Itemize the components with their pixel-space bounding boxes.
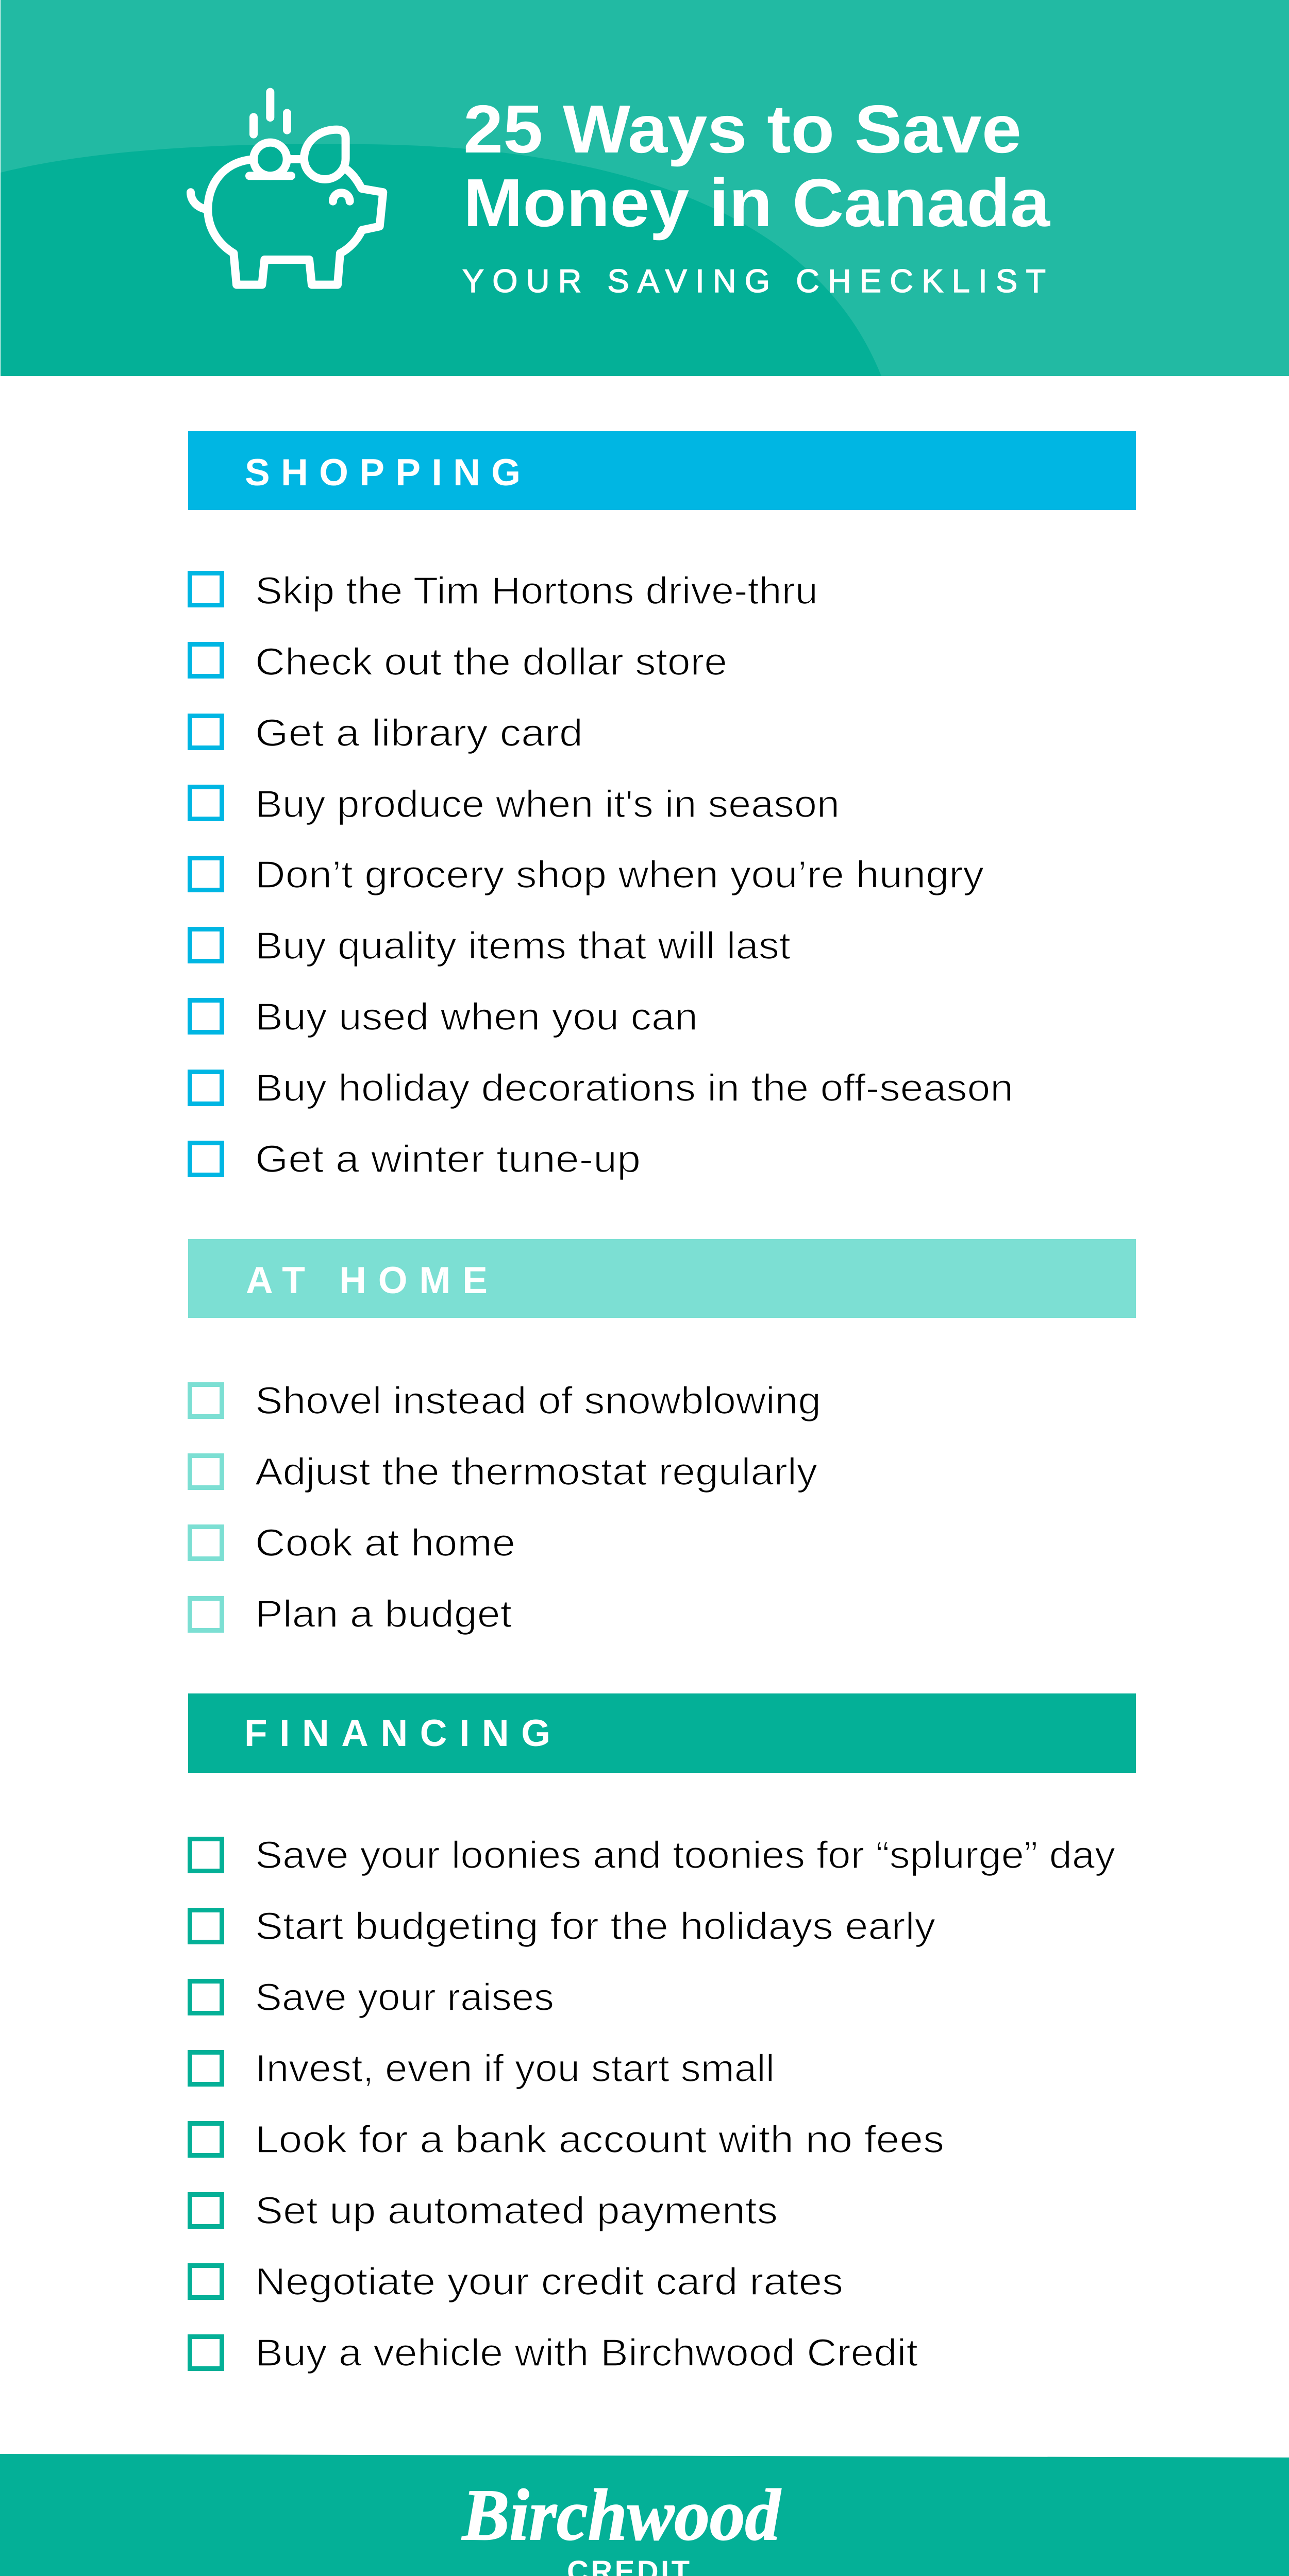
title xyxy=(463,91,1051,241)
checklist: shopping items xyxy=(190,569,1013,1180)
heading: financing: FINANCING xyxy=(244,1713,550,1754)
heading: shopping xyxy=(188,431,1136,510)
icon: piggy bank with falling coin xyxy=(191,92,383,285)
checklist: financing items: Set up automated payments xyxy=(255,2189,778,2232)
checklist: shopping items: Buy holiday decorations in the off-season xyxy=(255,1066,1013,1109)
title: Money in Canada xyxy=(463,165,1051,241)
checklist: financing items: Look for a bank account with no fees xyxy=(255,2118,944,2161)
checklist: at home items: Shovel instead of snowblowing xyxy=(255,1379,821,1422)
checklist: shopping items: Buy quality items that will last xyxy=(255,924,791,967)
checklist: financing items xyxy=(190,1834,1115,2374)
heading: at home xyxy=(188,1239,1136,1318)
checklist: shopping items: Skip the Tim Hortons drive-thru xyxy=(255,569,818,612)
checklist: at home items: Cook at home xyxy=(255,1521,515,1564)
checklist: at home items: Adjust the thermostat regularly xyxy=(255,1450,817,1493)
title: 25 Ways to Save xyxy=(463,91,1022,167)
heading: shopping: SHOPPING xyxy=(245,452,521,494)
checklist: at home items: Plan a budget xyxy=(255,1592,512,1635)
heading: financing xyxy=(188,1693,1136,1773)
checklist: financing items: Negotiate your credit card rates xyxy=(255,2260,843,2303)
header banner xyxy=(1,0,1289,376)
checklist: financing items: Save your raises xyxy=(255,1976,554,2019)
checklist: shopping items: Buy produce when it's in season xyxy=(255,783,840,825)
checklist: shopping items: Check out the dollar store xyxy=(255,640,727,683)
logo: Birchwood Credit: Birchwood xyxy=(461,2474,781,2555)
checklist: financing items: Invest, even if you start small xyxy=(255,2047,775,2090)
checklist: shopping items: Buy used when you can xyxy=(255,995,698,1038)
checklist: shopping items: Get a library card xyxy=(255,711,583,754)
checklist: shopping items: Get a winter tune-up xyxy=(255,1138,641,1180)
subtitle: YOUR SAVING CHECKLIST xyxy=(462,263,1046,299)
footer banner xyxy=(0,2454,1289,2576)
checklist: financing items: Buy a vehicle with Birchwood Credit xyxy=(255,2331,918,2374)
heading: at home: AT HOME xyxy=(246,1260,488,1301)
panel: financing xyxy=(188,1693,1136,2374)
checklist: at home items xyxy=(190,1379,821,1635)
panel: shopping xyxy=(188,431,1136,1180)
checklist: financing items: Start budgeting for the holidays early xyxy=(255,1905,935,1947)
panel: at home xyxy=(188,1239,1136,1635)
checklist: shopping items: Don’t grocery shop when you’re hungry xyxy=(255,853,984,896)
checklist: financing items: Save your loonies and toonies for “splurge” day xyxy=(255,1834,1115,1876)
